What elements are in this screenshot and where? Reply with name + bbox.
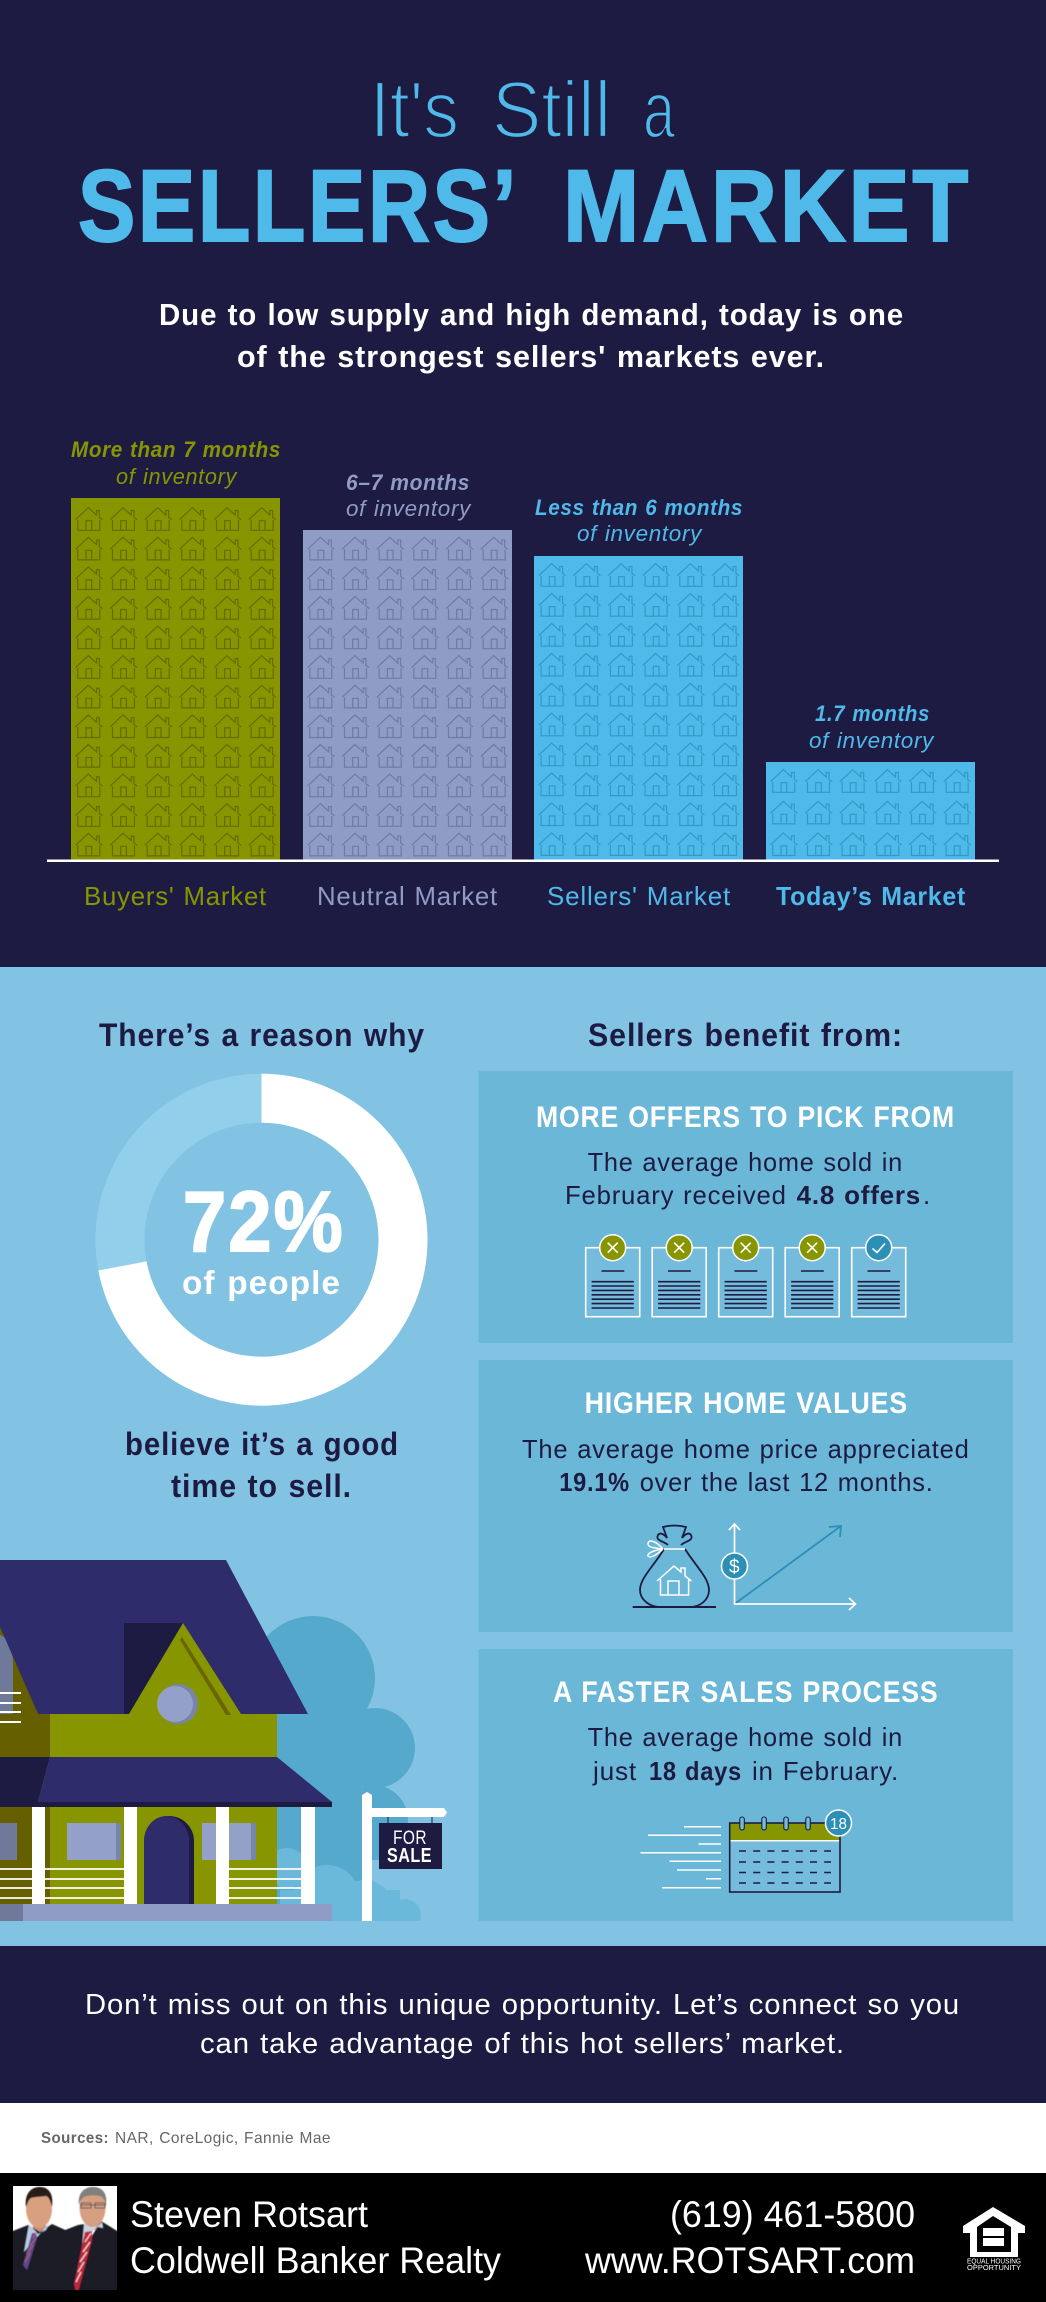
title: MARKET [563, 149, 971, 263]
bar: sellers' market [534, 495, 743, 911]
bar: sellers' market: Sellers' Market [547, 881, 731, 911]
panel: more offers to pick from: 4.8 offers [797, 1180, 921, 1210]
title: a [643, 65, 675, 154]
panel: more offers to pick from [478, 1071, 1013, 1343]
panel: more offers to pick from: February received [565, 1180, 787, 1210]
panel: more offers to pick from: MORE OFFERS TO PICK FROM [536, 1101, 955, 1134]
icon: offer documents [586, 1235, 906, 1317]
porch pillars [32, 1807, 315, 1904]
donut chart: 72% of people: 72% [183, 1175, 345, 1270]
agent name: Coldwell Banker Realty [130, 2240, 501, 2281]
panel: sources: Sources: [41, 2130, 109, 2147]
title: It's [370, 65, 459, 154]
panel: a faster sales process: A FASTER SALES PROCESS [553, 1676, 938, 1709]
for sale sign [362, 1792, 447, 1921]
bar: neutral market: of inventory [346, 496, 472, 521]
bar: today's market: 1.7 months [815, 701, 930, 726]
title [78, 65, 971, 263]
panel: a faster sales process: 18 days [649, 1756, 742, 1786]
bar: today's market: of inventory [809, 728, 935, 753]
agent photo [13, 2186, 117, 2290]
subtitle [159, 297, 904, 374]
main roof [0, 1560, 308, 1714]
icon: speeding calendar: 18 [830, 1816, 847, 1833]
panel: call to action [0, 1946, 1046, 2103]
door [144, 1816, 194, 1904]
panel: sources: NAR, CoreLogic, Fannie Mae [115, 2130, 331, 2147]
panel: a faster sales process [478, 1649, 1013, 1921]
dormer [124, 1623, 241, 1724]
bar chart: months of inventory [47, 437, 999, 911]
contact details: www.ROTSART.com [584, 2240, 915, 2281]
agent name [130, 2194, 501, 2281]
text: believe it's a good time to sell [125, 1426, 399, 1504]
for sale sign: FOR [393, 1828, 427, 1849]
bar: neutral market: Neutral Market [317, 881, 498, 911]
panel: a faster sales process: in February. [752, 1756, 899, 1786]
donut chart: 72% of people: of people [182, 1264, 341, 1301]
donut chart: 72% of people [120, 1098, 403, 1381]
panel: higher home values [478, 1360, 1013, 1632]
bar: neutral market [303, 470, 512, 911]
illustration: house with for sale sign [0, 1560, 447, 1934]
side window [0, 1635, 13, 1714]
text: believe it's a good time to sell: believe it’s a good [125, 1426, 399, 1462]
panel: a faster sales process: just [592, 1756, 637, 1786]
panel: higher home values: HIGHER HOME VALUES [585, 1387, 908, 1420]
icon: speeding calendar [640, 1810, 852, 1892]
icon: rising value chart: $ [729, 1557, 740, 1578]
icon: equal housing opportunity: EQUAL HOUSING [967, 2258, 1021, 2266]
upper wall [50, 1714, 277, 1757]
contact details: (619) 461-5800 [670, 2194, 915, 2235]
bar: sellers' market: of inventory [577, 521, 703, 546]
icon: rising value chart [722, 1524, 856, 1610]
panel: higher home values: over the last 12 months. [640, 1467, 934, 1497]
porch walls [50, 1807, 277, 1904]
subtitle: of the strongest sellers' markets ever. [237, 339, 825, 374]
subtitle: Due to low supply and high demand, today is one [159, 297, 904, 332]
heading: there's a reason why: There’s a reason why [99, 1017, 425, 1053]
contact details [584, 2194, 915, 2281]
title: Still [492, 65, 611, 154]
panel: more offers to pick from: The average home sold in [588, 1147, 903, 1177]
bar: buyers' market [71, 437, 281, 911]
panel: a faster sales process: The average home sold in [588, 1722, 903, 1752]
icon: equal housing opportunity: OPPORTUNITY [967, 2265, 1021, 2272]
icon: money bag with house [633, 1526, 716, 1607]
windows [0, 1823, 256, 1860]
panel: call to action: can take advantage of this hot sellers’ market. [200, 2028, 845, 2060]
for sale sign: SALE [387, 1845, 432, 1867]
foundation [0, 1904, 332, 1921]
panel: light blue middle section [0, 967, 1046, 1946]
panel: higher home values: The average home price appreciated [522, 1434, 970, 1464]
panel: header and inventory chart background [0, 0, 1046, 967]
bar: buyers' market: More than 7 months [71, 437, 281, 462]
bar: neutral market: 6–7 months [346, 470, 470, 495]
bar: today's market [766, 701, 975, 911]
panel: call to action: Don’t miss out on this unique opportunity. Let’s connect so you [85, 1989, 960, 2021]
panel: higher home values: 19.1% [559, 1467, 630, 1497]
porch roof [0, 1757, 332, 1807]
panel: more offers to pick from: . [923, 1180, 931, 1210]
bar: buyers' market: Buyers' Market [84, 881, 267, 911]
bar: sellers' market: Less than 6 months [535, 495, 743, 520]
agent name: Steven Rotsart [130, 2194, 369, 2235]
bar: buyers' market: of inventory [116, 464, 238, 489]
icon: equal housing opportunity [963, 2207, 1025, 2272]
porch railing [0, 1869, 301, 1898]
panel: sources [0, 2103, 1046, 2173]
tree [267, 1616, 421, 1921]
text: believe it's a good time to sell: time to sell. [171, 1468, 352, 1504]
panel: agent footer [0, 2173, 1046, 2302]
bar: today's market: Today’s Market [776, 881, 966, 911]
heading: sellers benefit from: Sellers benefit from: [588, 1017, 903, 1053]
title: SELLERS’ [78, 149, 519, 263]
